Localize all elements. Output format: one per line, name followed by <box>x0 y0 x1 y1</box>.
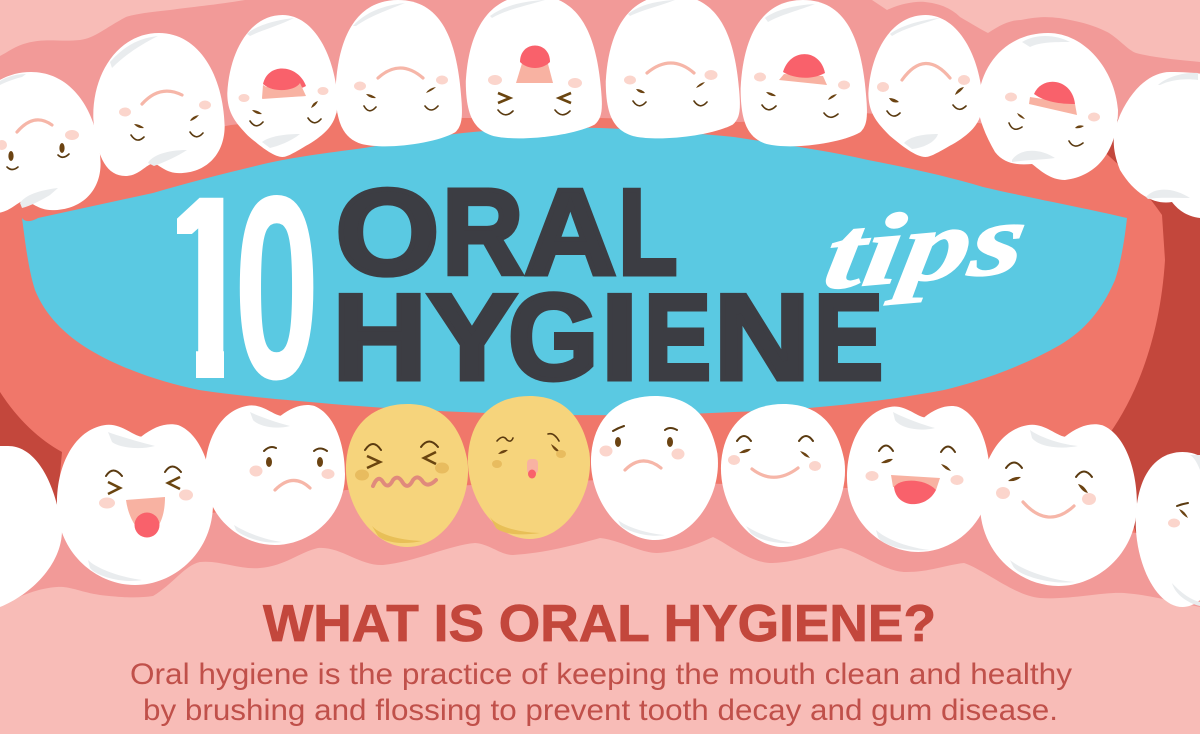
title: ORAL: L <box>618 164 677 300</box>
title: HYGIENE: H <box>333 269 427 405</box>
tooth upper 2 <box>93 33 225 176</box>
tooth lower 6 <box>591 396 718 540</box>
tooth upper 10 <box>1114 72 1200 218</box>
dark cheek right <box>1100 108 1200 533</box>
title: HYGIENE: E <box>814 269 883 405</box>
lower pale gum <box>0 537 1200 734</box>
tooth lower 4: yellow <box>346 404 468 547</box>
tooth lower 1 <box>0 446 62 607</box>
tooth lower 9 <box>980 424 1137 586</box>
title: HYGIENE: I <box>601 269 638 405</box>
upper pale gum left <box>0 0 245 56</box>
tooth lower 7 <box>721 404 845 547</box>
title: 10 <box>177 195 314 380</box>
tooth upper 4 <box>336 0 462 146</box>
title: 10: 1 <box>155 141 257 434</box>
tooth lower 2 <box>57 424 213 585</box>
title: HYGIENE: G <box>508 269 598 405</box>
tooth upper 8 <box>868 15 983 157</box>
title: ORAL: A <box>524 164 616 300</box>
tooth lower 8 <box>847 406 990 552</box>
heading: what is oral hygiene: WHAT IS ORAL HYGIENE? <box>263 595 936 653</box>
dark cheek left <box>0 392 62 530</box>
tooth lower 10 <box>1136 452 1200 607</box>
tooth lower 3 <box>205 405 345 545</box>
tongue: blue title panel <box>22 128 1127 415</box>
tooth upper 1 <box>0 72 101 213</box>
upper teeth <box>0 0 1200 218</box>
description line 1: Oral hygiene is the practice of keeping the mouth clean and healthy <box>130 658 1072 691</box>
title: HYGIENE: N <box>714 269 810 405</box>
tooth lower 5: yellow <box>468 396 590 539</box>
tooth upper 6 <box>606 0 740 138</box>
title: HYGIENE: Y <box>428 269 516 405</box>
title: 10: 0 <box>234 141 320 434</box>
tooth upper 3 <box>227 15 338 157</box>
tooth upper 9 <box>978 33 1118 180</box>
mouth interior <box>0 113 1200 540</box>
title: tips script: tips <box>818 181 1035 311</box>
description line 2: by brushing and flossing to prevent tooth decay and gum disease. <box>143 694 1058 727</box>
tooth upper 5 <box>466 0 602 138</box>
title: HYGIENE: E <box>644 269 711 405</box>
upper pale gum right <box>872 0 1200 62</box>
title: ORAL: O <box>336 164 439 300</box>
lower teeth <box>0 396 1200 607</box>
tooth upper 7 <box>741 0 867 146</box>
title: ORAL: R <box>442 164 523 300</box>
